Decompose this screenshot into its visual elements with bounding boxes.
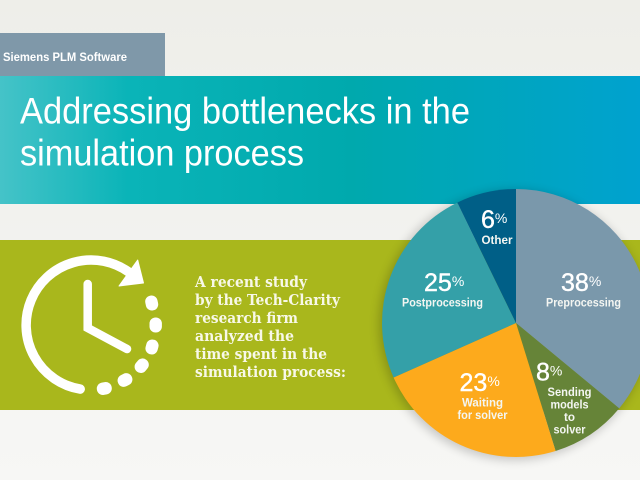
intro text: research firm: [195, 309, 298, 327]
slice: Other 6%: [457, 189, 516, 323]
intro text: analyzed the: [195, 327, 294, 345]
slice: Preprocessing 38%: [516, 189, 640, 408]
label: 23% Waiting for solver: %: [487, 373, 500, 389]
label: 6% Other: %: [495, 210, 507, 226]
slice: Postprocessing 25%: [382, 203, 516, 378]
label: 25% Postprocessing: [402, 269, 483, 310]
label: 38% Preprocessing: Preprocessing: [546, 298, 621, 310]
icon: clock with arrow: [26, 260, 162, 396]
label: 23% Waiting for solver: Waiting: [462, 398, 503, 410]
intro text: by the Tech-Clarity: [195, 291, 341, 309]
intro text: time spent in the: [195, 345, 327, 363]
pie shadow: [379, 190, 640, 460]
label: 6% Other: 6: [481, 206, 495, 234]
title: [20, 90, 470, 174]
label: 8% Sending models to solver: Sending: [548, 387, 592, 399]
label: 23% Waiting for solver: for solver: [458, 410, 508, 422]
label: 8% Sending models to solver: %: [550, 362, 562, 378]
tag: Siemens PLM Software: [0, 33, 165, 76]
slice: Sending models to solver 8%: [516, 323, 619, 451]
title: Addressing bottlenecks in the: [20, 90, 470, 132]
olive band: [0, 240, 640, 410]
label: 25% Postprocessing: 25: [424, 269, 452, 297]
label: 38% Preprocessing: 38: [561, 269, 589, 297]
label: 8% Sending models to solver: to: [564, 412, 575, 424]
label: 6% Other: [481, 206, 513, 247]
label: 38% Preprocessing: %: [589, 273, 601, 289]
label: 25% Postprocessing: %: [452, 273, 464, 289]
label: 8% Sending models to solver: models: [550, 400, 588, 412]
label: 8% Sending models to solver: solver: [554, 424, 586, 436]
label: 38% Preprocessing: [546, 269, 621, 310]
title: simulation process: [20, 132, 304, 174]
intro text: simulation process:: [195, 363, 346, 381]
slice: Waiting for solver 23%: [394, 323, 556, 457]
label: 8% Sending models to solver: 8: [536, 358, 550, 386]
label: 23% Waiting for solver: [458, 369, 508, 422]
label: 6% Other: Other: [482, 235, 513, 247]
header band: [0, 76, 640, 204]
tag: Siemens PLM Software: Siemens PLM Software: [3, 52, 127, 64]
label: 8% Sending models to solver: [536, 358, 592, 436]
label: 25% Postprocessing: Postprocessing: [402, 298, 483, 310]
intro text: A recent study: [194, 273, 308, 291]
label: 23% Waiting for solver: 23: [460, 369, 487, 397]
intro text: [194, 273, 346, 381]
pie chart: [382, 189, 640, 457]
